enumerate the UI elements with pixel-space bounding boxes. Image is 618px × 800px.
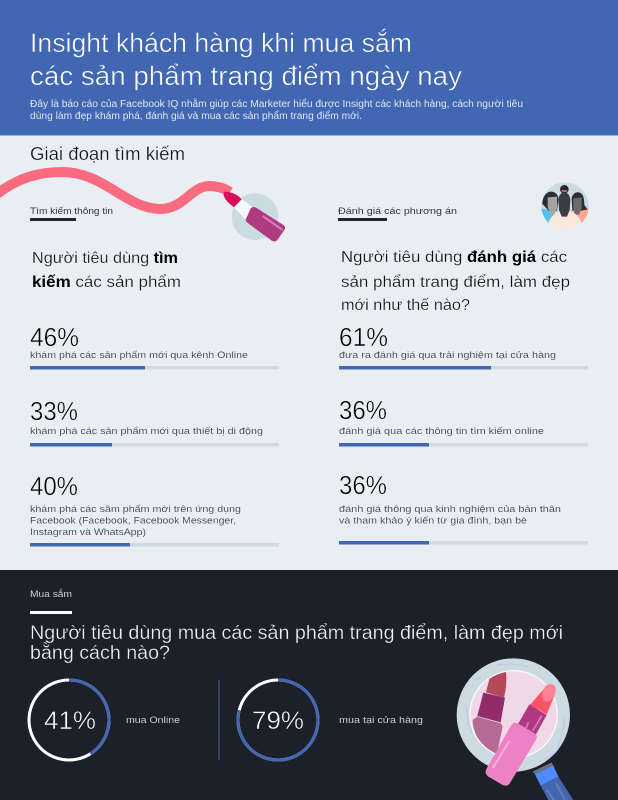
column question: Người tiêu dùng tìm — [32, 250, 178, 267]
column question: sản phẩm trang điểm, làm đẹp — [341, 273, 570, 291]
donut: 79% in store: mua tại cửa hàng — [339, 715, 423, 726]
donut: 41% online — [29, 680, 180, 760]
column question — [341, 249, 570, 314]
stat: 40%: khám phá các sầm phẩm mới trên ứng dụng — [30, 504, 241, 515]
stat: 33% — [30, 396, 279, 446]
column question — [32, 250, 181, 291]
stat: 61%: đưa ra đánh giá qua trải nghiệm tại cửa hàng — [339, 350, 556, 361]
stat: 61% — [339, 322, 588, 370]
section heading: bằng cách nào? — [30, 642, 170, 664]
intro text: Đây là báo cáo của Facebook IQ nhằm giúp các Marketer hiểu được Insight các khách hàng, cách người tiêu — [30, 97, 523, 110]
section heading: Giai đoạn tìm kiếm — [30, 144, 185, 164]
section label — [30, 589, 72, 614]
section label: Mua sắm — [30, 589, 72, 600]
intro text — [30, 97, 523, 122]
stat: 46% — [30, 322, 279, 370]
donut: 41% online: mua Online — [126, 715, 180, 726]
stat: 33%: 33% — [30, 396, 78, 426]
column label: Đánh giá các phương án — [338, 206, 457, 217]
stat: 46%: 46% — [30, 322, 79, 352]
stat: 61%: 61% — [339, 322, 388, 352]
column label — [30, 206, 113, 221]
column question: kiếm các sản phẩm — [32, 273, 181, 291]
icon: lipstick with squiggle trail — [0, 172, 285, 242]
column question: mới như thế nào? — [341, 297, 470, 314]
column question: Người tiêu dùng đánh giá các — [341, 249, 567, 266]
donut: 41% online: 41% — [44, 707, 96, 735]
title: các sản phẩm trang điểm ngày nay — [30, 61, 463, 91]
donut: 79% in store: 79% — [252, 707, 304, 735]
title: Insight khách hàng khi mua sắm — [30, 27, 412, 58]
stat: 40%: Facebook (Facebook, Facebook Messenger, — [30, 516, 236, 526]
section heading — [30, 623, 563, 664]
donut: 79% in store — [238, 680, 423, 760]
stat: 36% experience: 36% — [339, 470, 387, 500]
stat: 36% online — [339, 395, 588, 446]
stat: 36% experience: và tham khảo ý kiến từ gia đình, bạn bè — [339, 516, 527, 526]
stat: 40%: Instagram và WhatsApp) — [30, 527, 146, 538]
panel: mua sắm — [0, 570, 618, 800]
stat: 36% online: đánh giá qua các thông tin tìm kiếm online — [339, 426, 544, 437]
column label — [338, 206, 457, 221]
icon: three people — [541, 182, 588, 230]
column: tìm kiếm thông tin — [30, 206, 279, 546]
title — [30, 27, 463, 91]
intro text: dùng làm đẹp khám phá, đánh giá và mua các sản phẩm trang điểm mới. — [30, 110, 362, 122]
icon: magnifier with lipsticks — [457, 658, 573, 800]
column label: Tìm kiếm thông tin — [30, 206, 113, 217]
stat: 40%: 40% — [30, 471, 78, 501]
stat: 40% — [30, 471, 279, 546]
stat: 36% experience — [339, 470, 588, 544]
stat: 36% online: 36% — [339, 395, 387, 425]
column: đánh giá các phương án — [338, 182, 592, 544]
section heading: Người tiêu dùng mua các sản phẩm trang điểm, làm đẹp mới — [30, 623, 563, 644]
stat: 36% experience: đánh giá thông qua kinh nghiệm của bản thân — [339, 504, 561, 515]
panel: header — [0, 0, 618, 136]
stat: 33%: khám phá các sản phẩm mới qua thiết bị di động — [30, 426, 263, 437]
stat: 46%: khám phá các sản phẩm mới qua kênh Online — [30, 350, 248, 361]
